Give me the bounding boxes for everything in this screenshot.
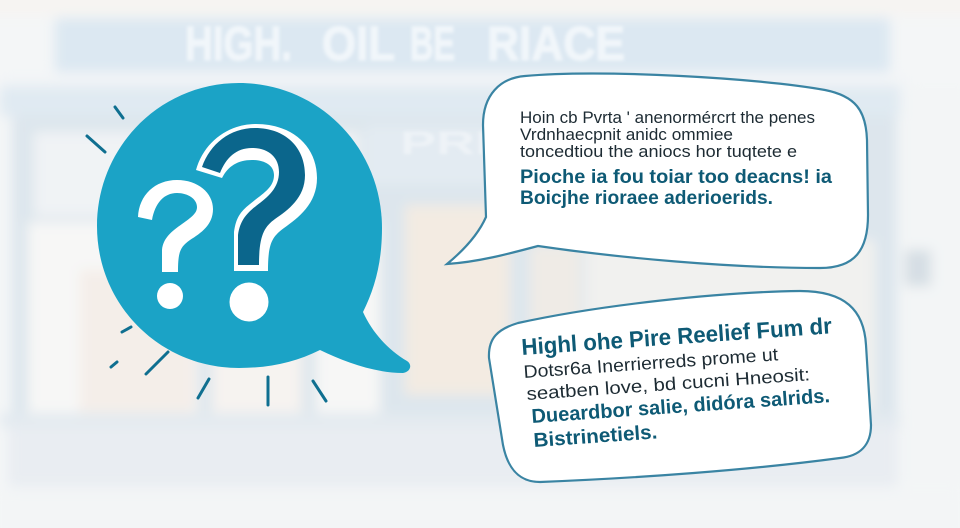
callout: top speech bubble	[447, 74, 868, 268]
icon: large dark question mark	[196, 124, 317, 322]
text block: bottom callout body	[523, 344, 811, 404]
icon: small white question mark	[138, 180, 213, 309]
background: blurred storefront: HIGH.	[185, 18, 292, 71]
text block: top callout highlight: Pioche ia fou toiar too deacns! ia	[520, 167, 832, 188]
bubble body with tail	[97, 83, 410, 373]
text block: bottom callout body: seatben love, bd cucni Hneosit:	[526, 364, 811, 404]
text block: top callout body: Vrdnhaecpnit anidc ommiee	[520, 125, 733, 144]
background: blurred storefront: BE	[410, 18, 455, 71]
background: blurred storefront: RIACE	[487, 18, 625, 71]
text block: top callout body: toncedtiou the aniocs hor tuqtete e	[520, 142, 797, 161]
text block: bottom callout body: Dotsr6a Inerrierreds prome ut	[523, 344, 779, 382]
icon: emphasis rays	[87, 107, 326, 405]
text block: top callout body: Hoin cb Pvrta ' anenormércrt the penes	[520, 108, 815, 127]
text block: top callout highlight	[520, 167, 832, 209]
callout: bottom speech bubble	[489, 291, 871, 482]
text block: bottom callout highlight	[531, 385, 831, 452]
text block: top callout highlight: Boicjhe rioraee aderioerids.	[520, 188, 773, 209]
text block: bottom callout highlight: Dueardbor salie, didóra salrids.	[531, 385, 831, 428]
text block: bottom callout highlight: Bistrinetiels.	[533, 421, 658, 452]
heading: bottom callout: Highl ohe Pire Reelief Fum dr	[521, 312, 833, 360]
background: blurred storefront: OIL	[322, 18, 395, 71]
icon: question speech bubble	[97, 83, 410, 373]
text block: top callout body	[520, 108, 815, 161]
background: blurred storefront: PRI	[400, 125, 490, 161]
